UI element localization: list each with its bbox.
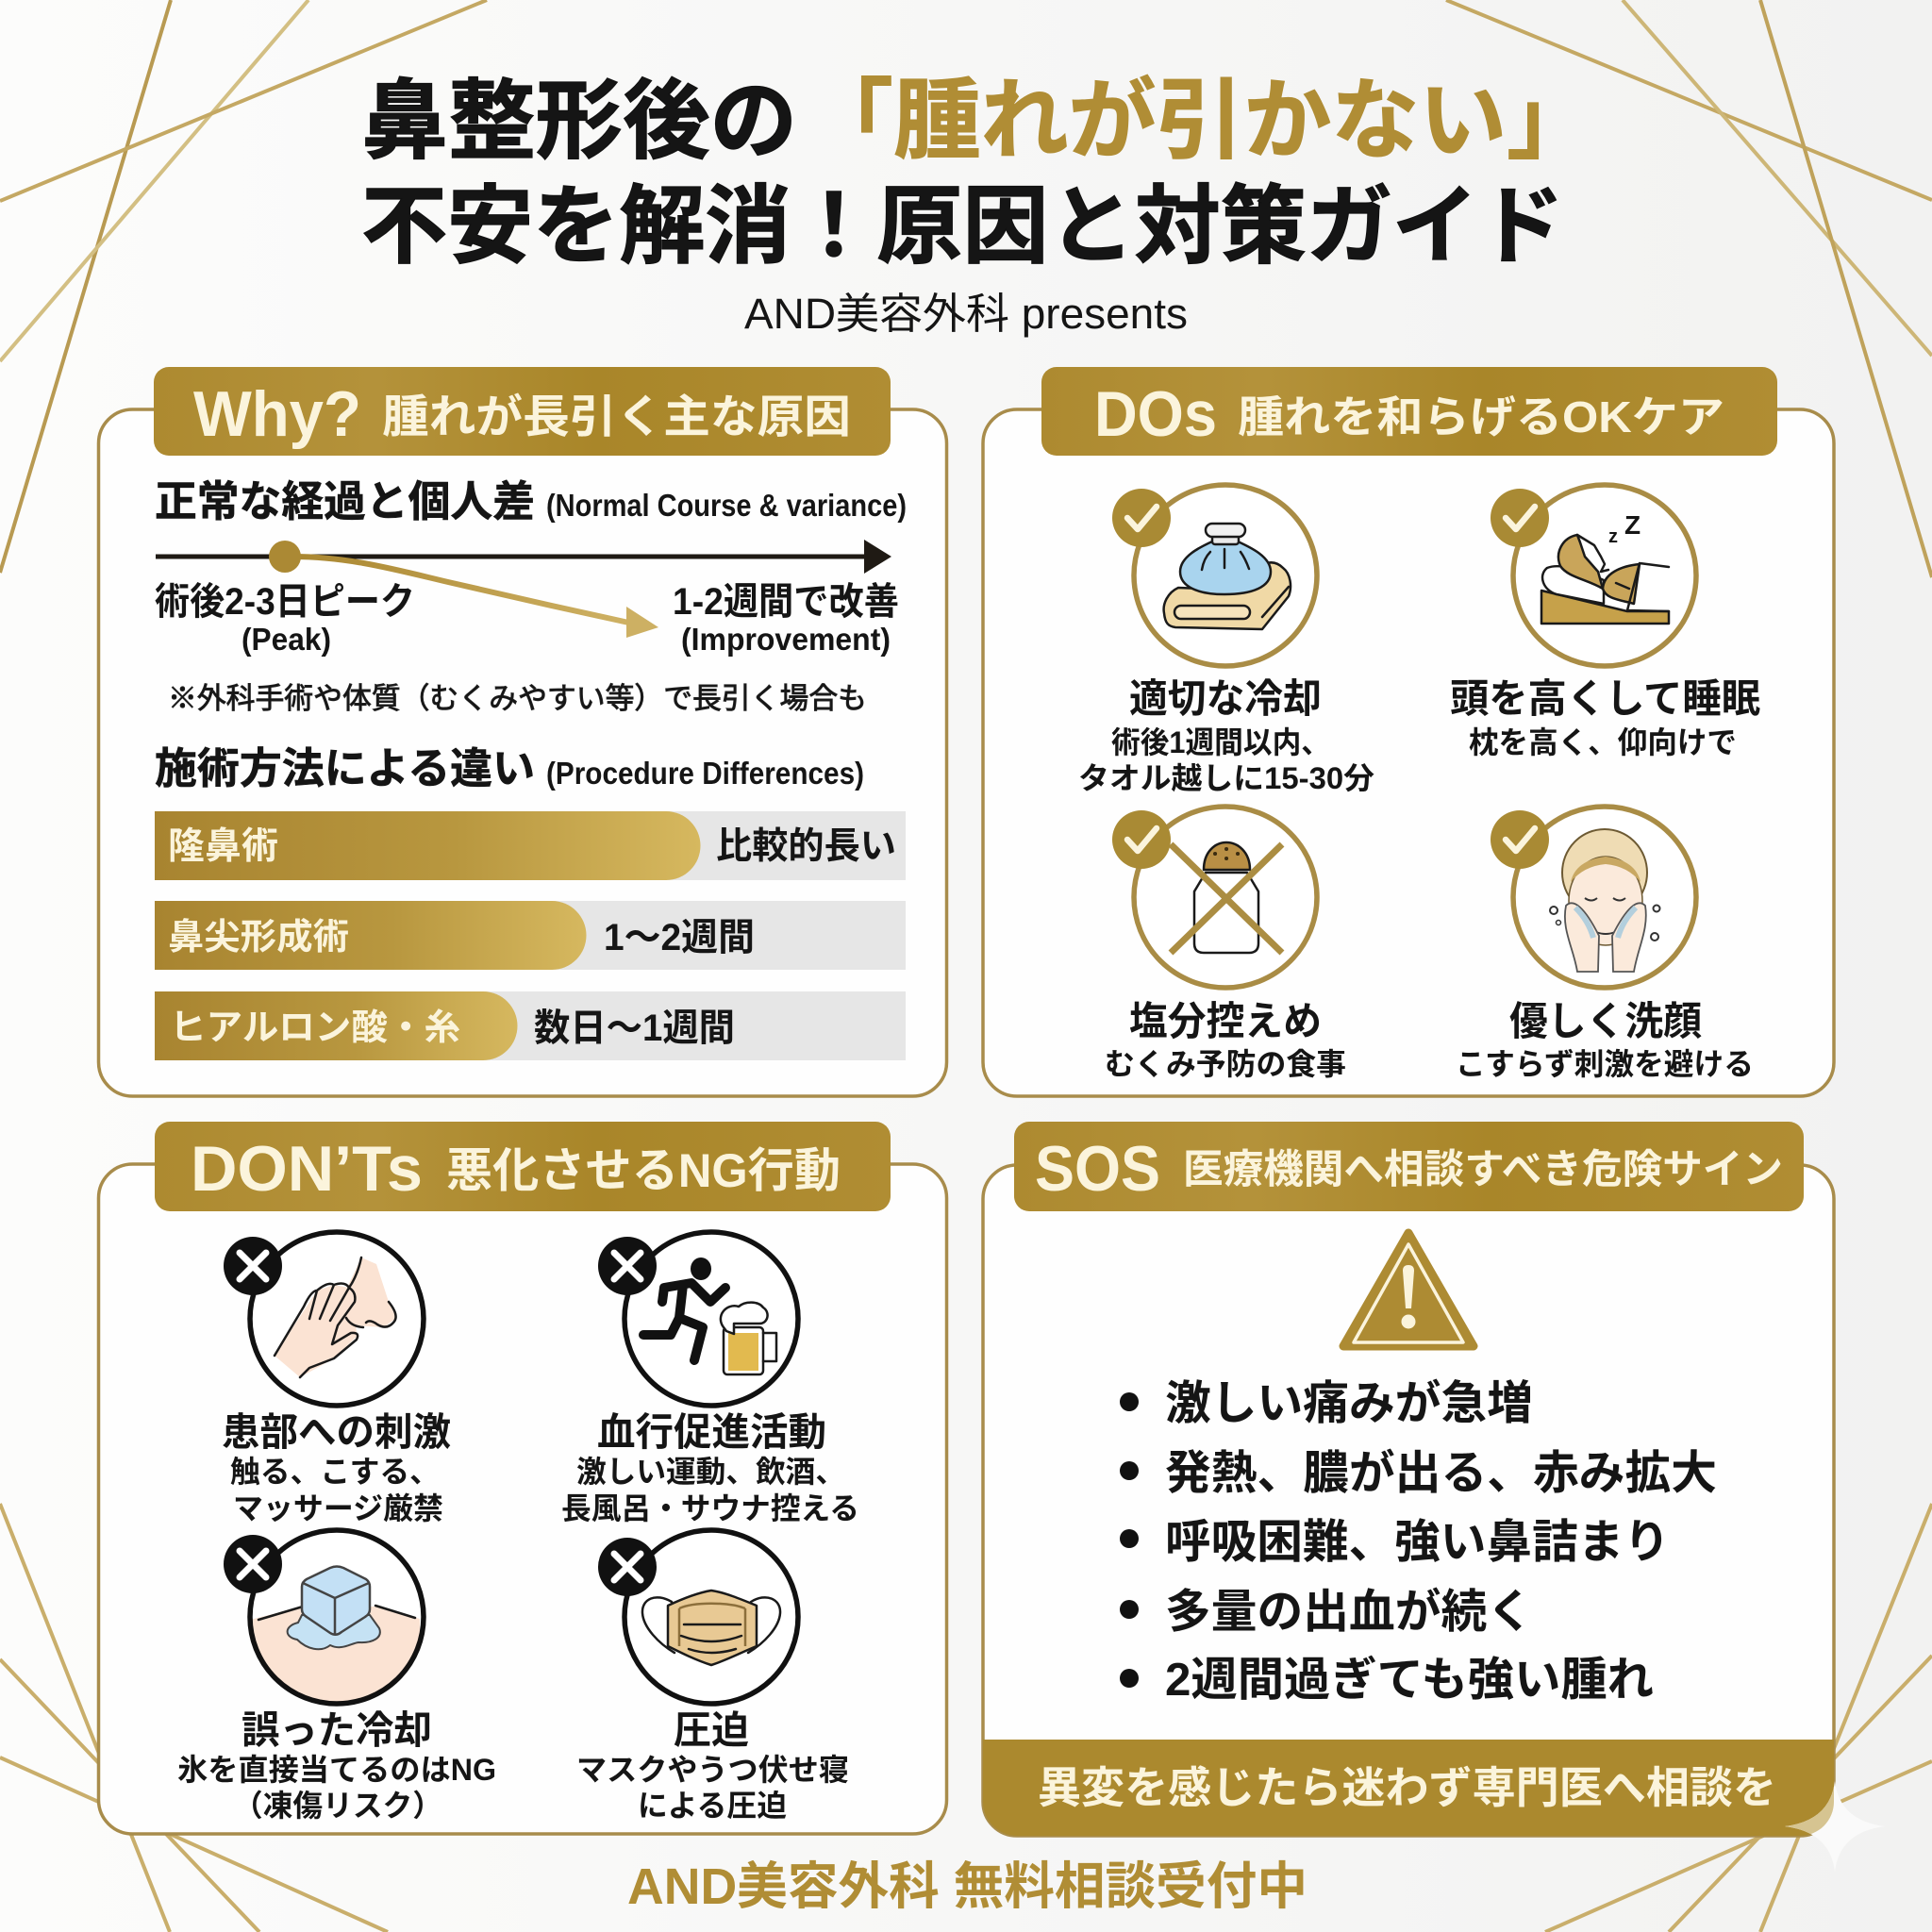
badge: x — [224, 1237, 282, 1295]
icon: ice on skin — [250, 1530, 424, 1707]
timeline chart: (Improvement) — [681, 622, 891, 657]
caption: touching: マッサージ厳禁 — [233, 1491, 443, 1525]
icon: runner and beer — [625, 1232, 798, 1406]
caption: touching: 患部への刺激 — [222, 1410, 451, 1454]
caption: wrong cooling: 誤った冷却 — [242, 1708, 432, 1752]
caption: blood flow: 激しい運動、飲酒、 — [576, 1455, 845, 1489]
subheading: procedure differences: 施術方法による違い — [155, 744, 535, 792]
caption: touching — [222, 1410, 451, 1525]
caption: compression: 圧迫 — [674, 1708, 749, 1752]
subheading: normal course — [155, 477, 907, 525]
title: 不安を解消！原因と対策ガイド — [361, 179, 1564, 275]
caption: wrong cooling: 氷を直接当てるのはNG — [177, 1753, 496, 1787]
heading: why: 腫れが長引く主な原因 — [382, 392, 851, 442]
danger sign list: 激しい痛みが急増 — [1165, 1378, 1533, 1429]
bar chart: procedure recovery time: 数日〜1週間 — [534, 1008, 735, 1049]
danger sign list: 発熱、膿が出る、赤み拡大 — [1165, 1448, 1717, 1499]
item: blood flow — [561, 1232, 859, 1525]
subheading: normal course: 正常な経過と個人差 — [155, 477, 535, 525]
caption: compression: マスクやうつ伏せ寝 — [576, 1753, 849, 1787]
icon: sparkle — [1785, 1781, 1885, 1872]
title — [361, 72, 1594, 275]
icon: warning triangle — [1343, 1233, 1474, 1346]
badge: check — [1491, 810, 1549, 869]
caption: sleep: 枕を高く、仰向けで — [1469, 725, 1737, 759]
caption: blood flow — [561, 1410, 859, 1525]
caption: touching: 触る、こする、 — [230, 1455, 440, 1489]
heading: donts: 悪化させるNG行動 — [446, 1144, 841, 1197]
caption: salt: むくみ予防の食事 — [1105, 1047, 1346, 1081]
heading: dos: DOs — [1094, 378, 1217, 450]
heading: donts: DON’Ts — [191, 1133, 423, 1205]
timeline chart: 術後2-3日ピーク — [155, 581, 415, 623]
danger sign list: 呼吸困難、強い鼻詰まり — [1165, 1517, 1670, 1568]
panel frame: why — [98, 409, 947, 1096]
subtitle: AND美容外科 presents — [744, 290, 1188, 338]
item: sleep with head raised — [1450, 485, 1760, 759]
caption: compression: による圧迫 — [638, 1789, 787, 1823]
timeline chart: 1-2週間で改善 — [673, 581, 899, 623]
caption: face wash: 優しく洗顔 — [1509, 999, 1702, 1043]
caption: sleep: 頭を高くして睡眠 — [1450, 676, 1760, 721]
item: wrong cooling — [177, 1530, 496, 1823]
caption: sleep — [1450, 676, 1760, 759]
heading: why: Why? — [193, 378, 361, 450]
caption: blood flow: 長風呂・サウナ控える — [561, 1491, 859, 1525]
bar chart: procedure recovery time: 比較的長い — [716, 826, 896, 867]
icon: crossed-out salt shaker — [1134, 807, 1317, 988]
bar chart: procedure recovery time — [155, 811, 906, 1060]
icon: woman washing face — [1513, 807, 1696, 988]
footer callout: 異変を感じたら迷わず専門医へ相談を — [1038, 1763, 1776, 1812]
title: 「腫れが引かない」 — [806, 72, 1594, 170]
panel: dos — [983, 367, 1834, 1096]
danger sign list: 多量の出血が続く — [1165, 1587, 1533, 1638]
item: cooling — [1078, 485, 1374, 795]
badge: check — [1491, 489, 1549, 547]
item: touching the area — [222, 1232, 451, 1525]
caption: cooling: 適切な冷却 — [1129, 676, 1322, 721]
panel frame: donts — [98, 1164, 947, 1834]
panel: sos — [983, 1122, 1834, 1836]
footer callout — [983, 1740, 1834, 1836]
note: ※外科手術や体質（むくみやすい等）で長引く場合も — [168, 682, 867, 715]
heading: donts — [155, 1122, 891, 1211]
heading: dos — [1041, 367, 1777, 456]
caption: wrong cooling: （凍傷リスク） — [233, 1789, 442, 1823]
subheading: procedure differences: (Procedure Differences) — [546, 756, 864, 791]
bar chart: procedure recovery time: 隆鼻術 — [168, 826, 278, 867]
panel: why swelling lingers — [98, 367, 947, 1096]
caption: salt — [1105, 999, 1346, 1081]
heading: dos: 腫れを和らげるOKケア — [1238, 392, 1724, 441]
danger sign list — [1120, 1378, 1717, 1706]
panel frame: dos — [983, 409, 1834, 1096]
caption: compression — [576, 1708, 849, 1823]
subheading: procedure differences — [155, 744, 864, 792]
caption: blood flow: 血行促進活動 — [597, 1410, 826, 1454]
item: low salt — [1105, 807, 1346, 1081]
timeline chart: (Peak) — [242, 622, 331, 657]
icon: sleeping on wedge pillow: Z — [1624, 510, 1641, 540]
heading: sos: SOS — [1035, 1133, 1160, 1205]
badge: x — [598, 1538, 657, 1596]
panel frame: sos — [983, 1165, 1834, 1836]
badge: x — [598, 1237, 657, 1295]
icon: sleeping on wedge pillow — [1513, 485, 1696, 666]
heading: sos: 医療機関へ相談すべき危険サイン — [1183, 1148, 1783, 1192]
timeline chart — [155, 540, 899, 657]
caption: face wash: こすらず刺激を避ける — [1456, 1047, 1754, 1081]
caption: salt: 塩分控えめ — [1129, 999, 1322, 1043]
heading: why — [154, 367, 891, 456]
panel: donts — [98, 1122, 947, 1834]
badge: x — [224, 1535, 282, 1593]
icon: ice bag and towel — [1134, 485, 1317, 666]
bar chart: procedure recovery time: 鼻尖形成術 — [168, 918, 349, 958]
title: 鼻整形後の — [361, 74, 797, 170]
danger sign list: 2週間過ぎても強い腫れ — [1165, 1655, 1654, 1706]
caption: cooling — [1078, 676, 1374, 795]
item: compression — [576, 1530, 849, 1823]
icon: hand touching nose — [250, 1232, 424, 1406]
bottom call to action: AND美容外科 無料相談受付中 — [627, 1858, 1307, 1915]
icon: face mask — [625, 1530, 798, 1704]
badge: check — [1112, 489, 1171, 547]
icon: sleeping on wedge pillow: z — [1608, 526, 1618, 547]
bar chart: procedure recovery time: 1〜2週間 — [604, 917, 755, 958]
bar chart: procedure recovery time: ヒアルロン酸・糸 — [170, 1008, 460, 1048]
subheading: normal course: (Normal Course & variance) — [546, 488, 907, 523]
caption: wrong cooling — [177, 1708, 496, 1823]
caption: cooling: タオル越しに15-30分 — [1078, 761, 1374, 795]
caption: face wash — [1456, 999, 1754, 1081]
caption: cooling: 術後1週間以内、 — [1111, 725, 1330, 759]
item: gentle face wash — [1456, 807, 1754, 1081]
badge: check — [1112, 810, 1171, 869]
heading: sos — [1014, 1122, 1804, 1211]
